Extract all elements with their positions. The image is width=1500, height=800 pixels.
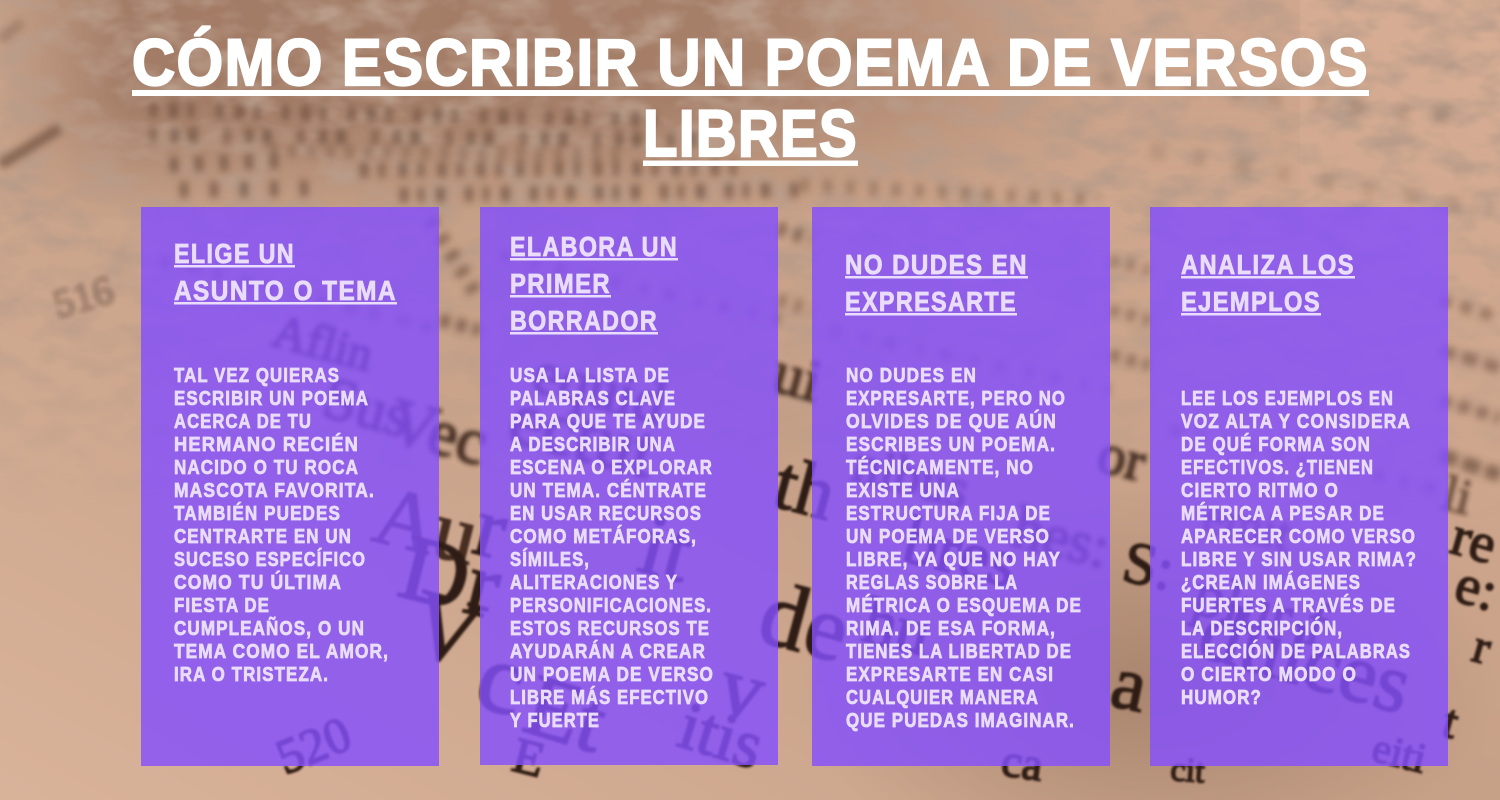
body text: elabora un primer borrador: COMO METÁFORAS, bbox=[510, 525, 697, 548]
background: blurred book page: S: bbox=[1117, 528, 1180, 603]
heading: analiza los ejemplos bbox=[1181, 249, 1355, 317]
body text: elabora un primer borrador: UN POEMA DE VERSO bbox=[510, 663, 714, 686]
body text: no dudes en expresarte bbox=[846, 364, 1082, 732]
body text: elige un asunto o tema: ESCRIBIR UN POEMA bbox=[174, 387, 369, 410]
background: blurred book page: emit bbox=[1197, 486, 1297, 562]
panel: elabora un primer borrador bbox=[480, 207, 778, 765]
body text: elige un asunto o tema: IRA O TRISTEZA. bbox=[174, 663, 329, 686]
body text: elige un asunto o tema: FIESTA DE bbox=[174, 594, 270, 617]
background: blurred book page: bres bbox=[896, 501, 1025, 602]
background: blurred book page: ui bbox=[767, 339, 829, 415]
background: blurred book page: v bbox=[710, 639, 775, 739]
background: blurred book page: r bbox=[465, 478, 518, 578]
background: blurred book page: a bbox=[1104, 639, 1155, 729]
body text: elige un asunto o tema: TEMA COMO EL AMOR, bbox=[174, 640, 389, 663]
heading: elige un asunto o tema: ELIGE UN bbox=[174, 238, 295, 269]
body text: no dudes en expresarte: LIBRE, YA QUE NO HAY bbox=[846, 548, 1061, 571]
body text: elabora un primer borrador: A DESCRIBIR UNA bbox=[510, 433, 676, 456]
background: blurred book page: or bbox=[1092, 422, 1152, 494]
body text: analiza los ejemplos bbox=[1181, 387, 1417, 709]
background: blurred book page: c bbox=[466, 619, 538, 738]
body text: analiza los ejemplos: APARECER COMO VERSO bbox=[1181, 525, 1416, 548]
body text: elabora un primer borrador: SÍMILES, bbox=[510, 548, 590, 571]
background: blurred book page: itis bbox=[671, 687, 772, 784]
heading: elabora un primer borrador bbox=[510, 231, 678, 336]
body text: no dudes en expresarte: TÉCNICAMENTE, NO bbox=[846, 456, 1034, 479]
background: blurred book page: it bbox=[630, 496, 702, 602]
body text: analiza los ejemplos: ¿CREAN IMÁGENES bbox=[1181, 571, 1361, 594]
body text: elige un asunto o tema: CENTRARTE EN UN bbox=[174, 525, 352, 548]
body text: analiza los ejemplos: O CIERTO MODO O bbox=[1181, 663, 1357, 686]
background: blurred book page: Aflin bbox=[267, 304, 379, 382]
background: blurred book page: equid bbox=[527, 339, 672, 437]
body text: elige un asunto o tema: TAMBIÉN PUEDES bbox=[174, 502, 341, 525]
body text: analiza los ejemplos: DE QUÉ FORMA SON bbox=[1181, 433, 1371, 456]
body text: elige un asunto o tema: COMO TU ÚLTIMA bbox=[174, 570, 342, 594]
body text: elabora un primer borrador: ESTOS RECURSOS TE bbox=[510, 617, 710, 640]
background: blurred book page: Et bbox=[514, 656, 617, 772]
background: blurred book page: hu bbox=[856, 584, 938, 671]
background: blurred book page: hes: bbox=[1007, 494, 1117, 581]
title: LIBRES bbox=[643, 96, 858, 170]
body text: elabora un primer borrador: LIBRE MÁS EFECTIVO bbox=[510, 686, 709, 709]
background: blurred book page: li bbox=[1437, 464, 1478, 525]
body text: elige un asunto o tema: TAL VEZ QUIERAS bbox=[174, 364, 340, 387]
panel: no dudes en expresarte bbox=[812, 207, 1110, 766]
heading: no dudes en expresarte: EXPRESARTE bbox=[845, 286, 1017, 317]
body text: no dudes en expresarte: NO DUDES EN bbox=[846, 364, 977, 387]
body text: analiza los ejemplos: LEE LOS EJEMPLOS EN bbox=[1181, 387, 1394, 410]
background: blurred book page: dulces bbox=[1190, 584, 1422, 732]
heading: elige un asunto o tema: ASUNTO O TEMA bbox=[174, 275, 397, 306]
body text: elige un asunto o tema: ACERCA DE TU bbox=[174, 410, 312, 433]
background: blurred book page: de bbox=[750, 561, 860, 682]
body text: elabora un primer borrador: AYUDARÁN A CREAR bbox=[510, 640, 706, 663]
body text: elabora un primer borrador: UN TEMA. CÉNTRATE bbox=[510, 479, 707, 502]
background: blurred book page: cit bbox=[1169, 751, 1206, 790]
body text: elabora un primer borrador: EN USAR RECURSOS bbox=[510, 502, 702, 525]
body text: no dudes en expresarte: EXPRESARTE EN CASI bbox=[846, 663, 1054, 686]
body text: elabora un primer borrador: ALITERACIONES Y bbox=[510, 571, 678, 594]
body text: elabora un primer borrador: PALABRAS CLAVE bbox=[510, 387, 676, 410]
background: blurred book page: 520 bbox=[268, 705, 359, 785]
body text: elige un asunto o tema: SUCESO ESPECÍFICO bbox=[174, 548, 366, 571]
background: blurred book page: r bbox=[1467, 620, 1497, 675]
background: blurred book page: E bbox=[507, 726, 551, 788]
body text: elige un asunto o tema: CUMPLEAÑOS, O UN bbox=[174, 617, 365, 640]
body text: no dudes en expresarte: EXISTE UNA bbox=[846, 479, 960, 502]
body text: elabora un primer borrador: PARA QUE TE AYUDE bbox=[510, 410, 706, 433]
heading: no dudes en expresarte: NO DUDES EN bbox=[845, 249, 1028, 280]
background: blurred book page: nibus bbox=[847, 433, 975, 520]
body text: no dudes en expresarte: MÉTRICA O ESQUEMA DE bbox=[846, 594, 1082, 617]
body text: no dudes en expresarte: UN POEMA DE VERSO bbox=[846, 525, 1050, 548]
heading: no dudes en expresarte bbox=[845, 249, 1028, 317]
body text: elige un asunto o tema bbox=[174, 364, 389, 686]
body text: analiza los ejemplos: ELECCIÓN DE PALABRAS bbox=[1181, 639, 1411, 663]
background: blurred book page: th bbox=[766, 440, 844, 537]
panel: elige un asunto o tema bbox=[141, 207, 439, 766]
body text: no dudes en expresarte: RIMA. DE ESA FORMA, bbox=[846, 617, 1056, 640]
body text: no dudes en expresarte: CUALQUIER MANERA bbox=[846, 686, 1039, 709]
heading: elabora un primer borrador: ELABORA UN bbox=[510, 231, 678, 262]
background: blurred book page: Au bbox=[365, 468, 488, 583]
title bbox=[132, 25, 1369, 170]
heading: elige un asunto o tema bbox=[174, 238, 397, 306]
body text: analiza los ejemplos: HUMOR? bbox=[1181, 686, 1262, 709]
body text: elabora un primer borrador: ESCENA O EXPLORAR bbox=[510, 456, 713, 479]
background: blurred book page: Sus bbox=[317, 364, 417, 450]
heading: analiza los ejemplos: EJEMPLOS bbox=[1181, 286, 1321, 317]
heading: analiza los ejemplos: ANALIZA LOS bbox=[1181, 249, 1355, 280]
background: blurred book page: eiti bbox=[1368, 725, 1431, 783]
body text: analiza los ejemplos: VOZ ALTA Y CONSIDERA bbox=[1181, 410, 1411, 433]
body text: elabora un primer borrador: PERSONIFICACIONES. bbox=[510, 594, 712, 617]
background: blurred book page: V bbox=[399, 567, 495, 689]
body text: no dudes en expresarte: QUE PUEDAS IMAGINAR. bbox=[846, 709, 1075, 732]
body text: analiza los ejemplos: EFECTIVOS. ¿TIENEN bbox=[1181, 456, 1374, 479]
heading: elabora un primer borrador: BORRADOR bbox=[510, 305, 658, 336]
body text: no dudes en expresarte: EXPRESARTE, PERO NO bbox=[846, 387, 1066, 410]
body text: analiza los ejemplos: LA DESCRIPCIÓN, bbox=[1181, 616, 1343, 640]
body text: no dudes en expresarte: REGLAS SOBRE LA bbox=[846, 571, 1018, 594]
body text: no dudes en expresarte: OLVIDES DE QUE AÚN bbox=[846, 409, 1057, 433]
body text: no dudes en expresarte: ESCRIBES UN POEMA. bbox=[846, 433, 1056, 456]
background: blurred book page: 516 bbox=[48, 267, 118, 327]
heading: elabora un primer borrador: PRIMER bbox=[510, 268, 611, 299]
body text: elige un asunto o tema: HERMANO RECIÉN bbox=[174, 433, 359, 456]
body text: analiza los ejemplos: MÉTRICA A PESAR DE bbox=[1181, 502, 1385, 525]
panel: analiza los ejemplos bbox=[1150, 207, 1448, 766]
background: blurred book page: ectut bbox=[501, 375, 665, 495]
body text: analiza los ejemplos: FUERTES A TRAVÉS DE bbox=[1181, 594, 1396, 617]
title: CÓMO ESCRIBIR UN POEMA DE VERSOS bbox=[132, 25, 1369, 99]
background: blurred book page: Dr bbox=[390, 514, 511, 639]
background: blurred book page: ca bbox=[999, 734, 1046, 791]
body text: elabora un primer borrador: USA LA LISTA DE bbox=[510, 364, 670, 387]
body text: elige un asunto o tema: MASCOTA FAVORITA. bbox=[174, 479, 375, 502]
body text: no dudes en expresarte: ESTRUCTURA FIJA DE bbox=[846, 502, 1051, 525]
body text: analiza los ejemplos: LIBRE Y SIN USAR RIMA? bbox=[1181, 548, 1417, 571]
background: blurred book page: Vec bbox=[381, 384, 496, 480]
body text: no dudes en expresarte: TIENES LA LIBERTAD DE bbox=[846, 640, 1072, 663]
body text: elabora un primer borrador bbox=[510, 364, 714, 732]
body text: elige un asunto o tema: NACIDO O TU ROCA bbox=[174, 456, 359, 479]
body text: elabora un primer borrador: Y FUERTE bbox=[510, 709, 600, 732]
background: blurred book page: t bbox=[1437, 695, 1465, 749]
background: blurred book page: plur f bbox=[1186, 560, 1336, 661]
body text: analiza los ejemplos: CIERTO RITMO O bbox=[1181, 479, 1339, 502]
